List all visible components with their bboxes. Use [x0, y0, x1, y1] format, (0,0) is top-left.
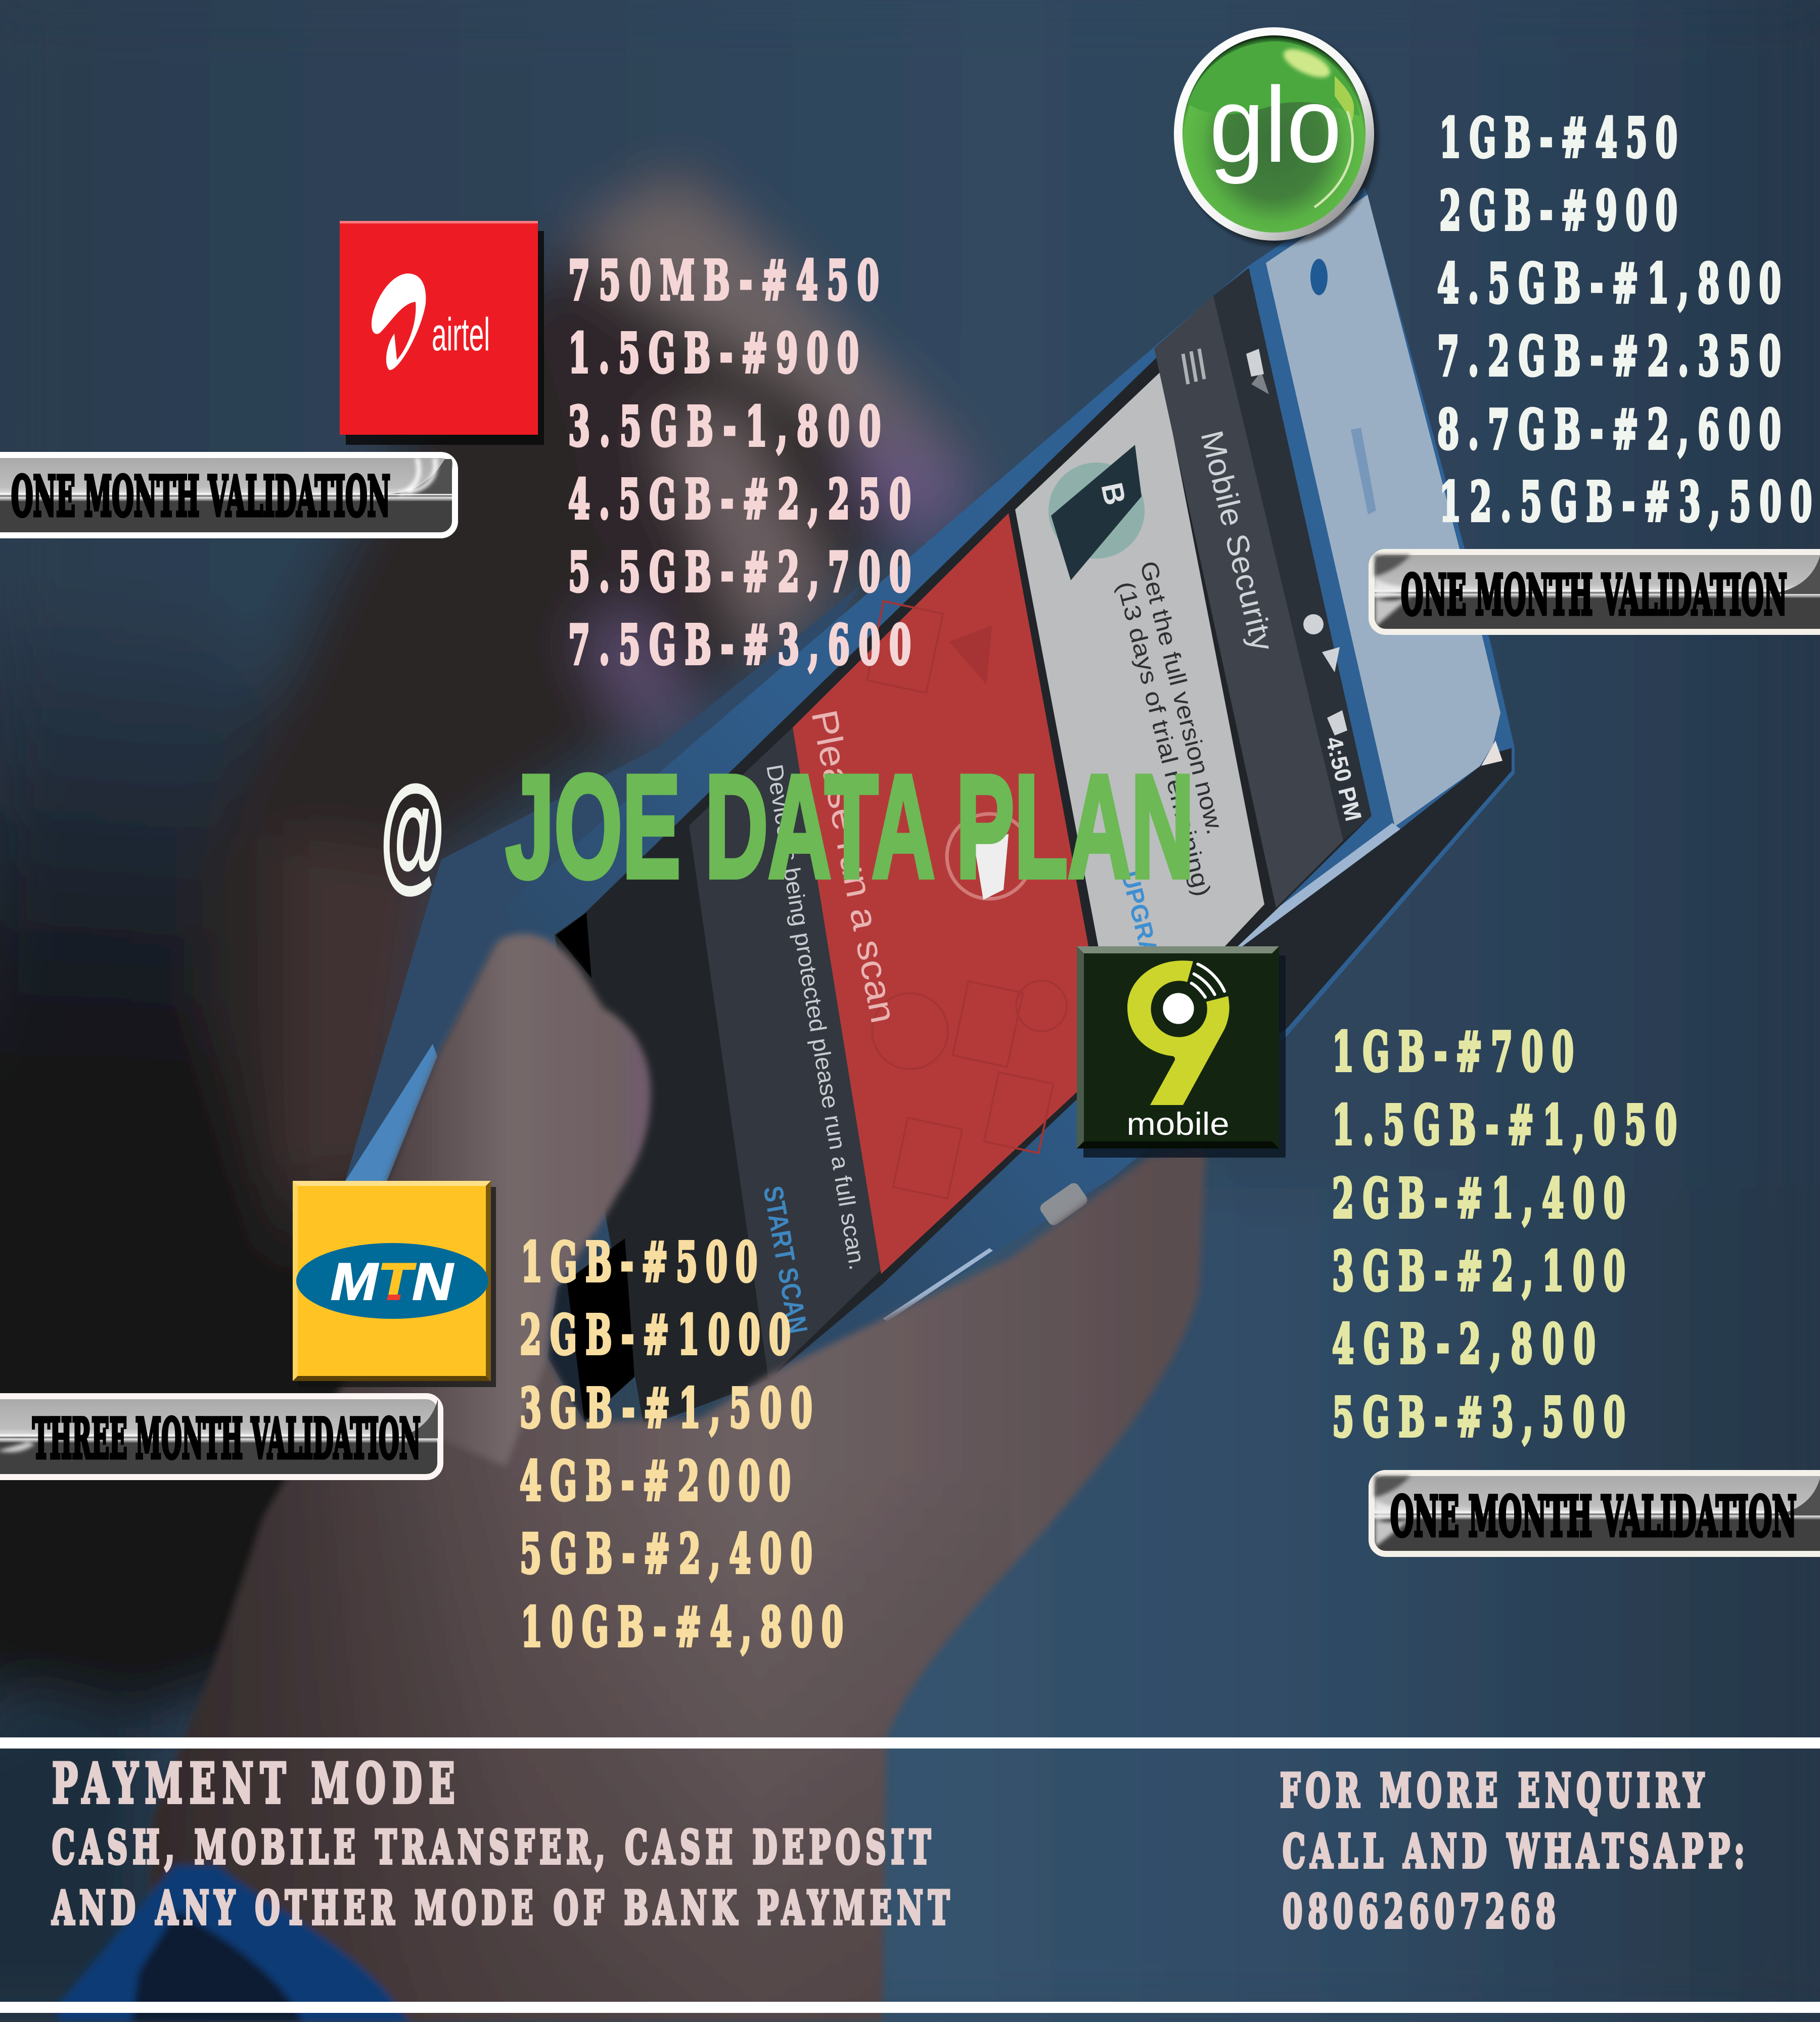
airtel logo [340, 221, 544, 445]
title [380, 745, 1194, 908]
mtn price list [520, 1230, 843, 1659]
9mobile logo: mobile [1126, 1107, 1230, 1142]
glo price list: 8.7GB-#2,600 [1437, 398, 1781, 462]
airtel validity button [0, 455, 455, 535]
palm and thumb [58, 934, 1206, 2022]
glo price list [1437, 106, 1812, 534]
airtel price list: 3.5GB-1,800 [568, 395, 881, 458]
glo price list: 7.2GB-#2.350 [1437, 325, 1781, 388]
panel: enquiry contact: CALL AND WHATSAPP: [1283, 1824, 1745, 1878]
glo logo [1174, 27, 1378, 245]
side button [1038, 1181, 1089, 1227]
mtn price list: 10GB-#4,800 [521, 1595, 843, 1659]
airtel price list: 1.5GB-#900 [568, 321, 859, 385]
airtel logo: airtel [432, 309, 490, 360]
phone body [506, 187, 1515, 1431]
glo price list: 1GB-#450 [1439, 106, 1677, 170]
at sign: @ [380, 759, 445, 903]
white rules [0, 1737, 1820, 2013]
glo price list: 4.5GB-#1,800 [1437, 252, 1781, 315]
9mobile logo [1077, 946, 1286, 1158]
red screen icons [867, 601, 1067, 1199]
mtn price list: 5GB-#2,400 [520, 1522, 812, 1586]
card graphic [1049, 463, 1145, 559]
airtel price list: 7.5GB-#3,600 [568, 613, 911, 677]
airtel price list [568, 249, 911, 677]
screen text: B [1095, 480, 1132, 508]
phone side rim [345, 586, 859, 1182]
panel: payment mode: AND ANY OTHER MODE OF BANK PAYMENT [52, 1881, 949, 1935]
airtel price list: 4.5GB-#2,250 [568, 468, 911, 531]
mtn price list: 4GB-#2000 [520, 1449, 791, 1513]
mtn price list: 3GB-#1,500 [520, 1376, 812, 1440]
mtn price list: 1GB-#500 [521, 1230, 757, 1294]
airtel price list: 5.5GB-#2,700 [568, 540, 911, 604]
panel: 9mobile [1077, 946, 1820, 1554]
airtel validity button: ONE MONTH VALIDATION [11, 464, 390, 529]
glo price list: 12.5GB-#3,500 [1439, 470, 1812, 534]
9mobile price list: 1.5GB-#1,050 [1332, 1093, 1677, 1157]
mtn validity button [0, 1396, 440, 1477]
phone [345, 187, 1515, 1431]
panel: glo [1174, 27, 1820, 632]
lower screen black strip [567, 1238, 634, 1422]
9mobile price list: 2GB-#1,400 [1332, 1167, 1625, 1230]
phone: START SCAN [757, 1184, 813, 1336]
panel: enquiry contact: FOR MORE ENQUIRY [1280, 1764, 1704, 1818]
phone: UPGRADE [1116, 868, 1171, 993]
9mobile price list: 5GB-#3,500 [1332, 1386, 1625, 1449]
phone: Mobile Security [1194, 427, 1280, 654]
glo price list: 2GB-#900 [1439, 179, 1677, 243]
phone screen [555, 268, 1372, 1428]
phone: Device is being protected please run a full scan. [761, 762, 871, 1272]
glo logo: glo [1209, 65, 1342, 185]
sleeve [58, 1865, 410, 2022]
joe data plan: JOE DATA PLAN [506, 745, 1194, 908]
phone: (13 days of trial remaining) [1112, 579, 1216, 899]
mtn logo [293, 1181, 496, 1387]
panel: enquiry contact: 08062607268 [1283, 1885, 1556, 1939]
phone: 4:50 PM [1321, 734, 1367, 823]
9mobile price list [1332, 1020, 1677, 1449]
9mobile price list: 3GB-#2,100 [1332, 1239, 1625, 1303]
airtel price list: 750MB-#450 [568, 249, 879, 312]
phone: Get the full version now. [1134, 559, 1228, 837]
mtn logo: MTN [331, 1253, 454, 1311]
panel: mtn [0, 1181, 843, 1659]
panel: payment mode: CASH, MOBILE TRANSFER, CASH DEPOSIT [52, 1820, 931, 1874]
phone: Please run a scan [803, 707, 904, 1026]
panel: mtn: THREE MONTH VALIDATION [32, 1406, 421, 1471]
status icons [1246, 349, 1347, 736]
mtn price list: 2GB-#1000 [520, 1303, 791, 1367]
9mobile price list: 4GB-2,800 [1332, 1312, 1596, 1376]
panel: payment mode [52, 1752, 949, 1935]
panel: enquiry contact [1280, 1764, 1745, 1939]
panel: airtel [0, 221, 911, 677]
9mobile price list: 1GB-#700 [1332, 1020, 1574, 1084]
panel: payment mode: PAYMENT MODE [52, 1752, 455, 1816]
